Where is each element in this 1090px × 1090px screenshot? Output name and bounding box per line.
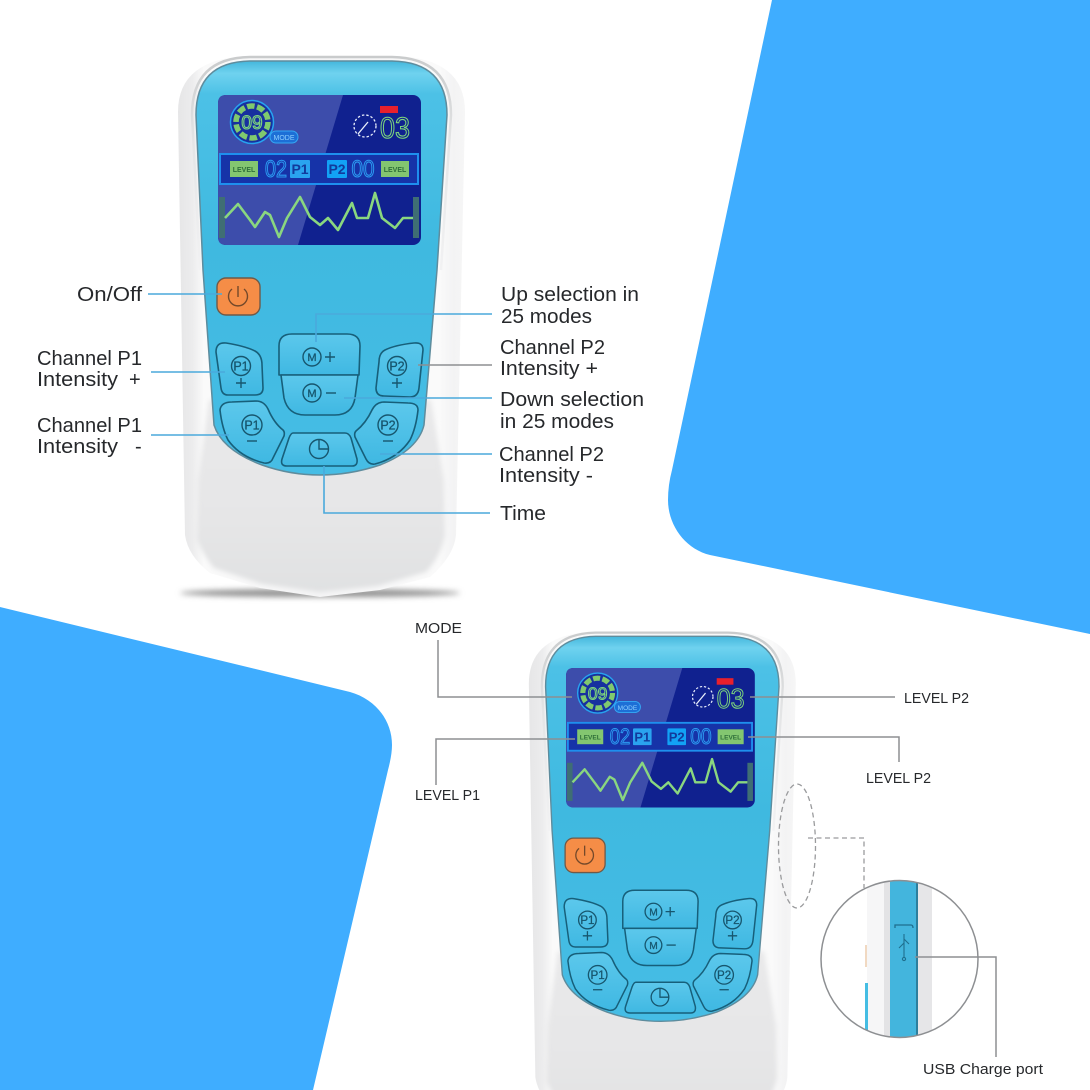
label: Time: Time — [500, 503, 546, 525]
mode ring: 09 — [241, 113, 263, 134]
level band: 02 — [265, 156, 287, 183]
screen — [566, 668, 755, 807]
button: P2 minus — [693, 953, 752, 1011]
label: LEVEL P2 lower: LEVEL P2 — [866, 770, 931, 787]
device shadow — [180, 589, 460, 597]
timer: 03 — [380, 112, 410, 145]
waveform — [219, 193, 419, 238]
label: Channel P1 Intensity +: Channel P1 — [37, 348, 142, 370]
waveform — [567, 759, 753, 801]
timer — [354, 106, 410, 145]
label: Up selection — [501, 284, 639, 328]
screen — [218, 95, 421, 245]
button: mode up — [623, 890, 698, 928]
button: P2 plus: P2 — [389, 360, 405, 374]
label: Channel P2 Intensity - — [499, 444, 604, 487]
callout: USB port magnifier — [821, 880, 978, 1043]
mode ring — [578, 673, 640, 713]
button: P1 plus: P1 — [233, 360, 249, 374]
button: P2 plus: P2 — [725, 914, 740, 927]
leader line: USB port — [915, 957, 996, 1057]
label: Channel P1 Intensity +: Intensity — [37, 369, 118, 391]
button: mode down — [625, 928, 696, 966]
level band: 02 — [610, 724, 630, 749]
device lower shell — [547, 952, 777, 1090]
label: Channel P1 Intensity - — [37, 415, 142, 458]
timer: 03 — [717, 683, 745, 714]
level band: P1 — [634, 729, 650, 744]
button: clock — [282, 433, 357, 466]
label: Down selection — [500, 389, 644, 433]
button: clock — [625, 982, 695, 1013]
blue face — [196, 61, 447, 475]
level band — [568, 723, 752, 751]
face rim — [542, 633, 783, 831]
label: Channel P2 Intensity +: Channel P2 — [500, 337, 605, 359]
level band: LEVEL — [720, 735, 741, 742]
device: bottom controller — [529, 632, 796, 1090]
button: mode down: M — [649, 941, 658, 952]
timer — [693, 678, 745, 714]
label: Down selection: Down selection — [500, 389, 644, 411]
level band: LEVEL — [580, 735, 601, 742]
level band: 00 — [352, 156, 374, 183]
level band: LEVEL — [384, 167, 407, 174]
button: P1 plus: P1 — [580, 914, 595, 927]
label: LEVEL P1: LEVEL P1 — [415, 787, 480, 804]
callout: USB port location dashed marker — [778, 784, 864, 908]
button: P1 minus — [568, 953, 628, 1010]
button: P2 plus — [376, 343, 423, 397]
button: mode up — [279, 334, 360, 375]
mode ring — [230, 100, 298, 144]
face rim — [192, 57, 451, 270]
label: USB Charge port: USB Charge port — [923, 1061, 1044, 1078]
level band: P1 — [291, 161, 309, 177]
power button — [565, 838, 605, 873]
level band: P2 — [328, 161, 346, 177]
button: P2 minus: P2 — [717, 969, 731, 982]
label: Up selection: Up selection in — [501, 284, 639, 306]
button: mode up: M — [307, 352, 317, 364]
device body — [529, 632, 796, 1090]
label: Channel P1 Intensity +: + — [129, 369, 141, 391]
label: Channel P1 Intensity + — [37, 348, 142, 391]
mode ring: 09 — [588, 684, 607, 704]
button: P1 plus — [216, 343, 263, 395]
label: Down selection: in 25 modes — [500, 411, 614, 433]
level band: LEVEL — [233, 167, 256, 174]
button: P1 minus — [220, 401, 284, 463]
button: mode down: M — [307, 388, 317, 400]
label: Channel P1 Intensity -: Channel P1 — [37, 415, 142, 437]
label: Channel P2 Intensity -: Channel P2 — [499, 444, 604, 466]
background shape: top right blue panel — [668, 0, 1090, 634]
level band: 00 — [690, 724, 712, 749]
button: P2 plus — [713, 898, 757, 949]
label: Channel P2 Intensity +: Intensity + — [500, 358, 598, 380]
icon: USB port — [895, 925, 913, 961]
mode ring: MODE — [274, 135, 295, 142]
label: MODE: MODE — [415, 620, 462, 637]
device body — [178, 56, 465, 597]
button: P2 minus: P2 — [380, 418, 396, 432]
level band: P2 — [669, 729, 685, 744]
device lower shell — [197, 400, 445, 592]
power button — [217, 278, 260, 315]
button: P1 minus: P1 — [591, 969, 605, 982]
button: P1 minus: P1 — [244, 418, 260, 432]
label: LEVEL P2 upper: LEVEL P2 — [904, 690, 969, 707]
label: Channel P1 Intensity -: Intensity — [37, 436, 118, 458]
label: Up selection: 25 modes — [501, 306, 592, 328]
label: Channel P2 Intensity -: Intensity - — [499, 465, 593, 487]
label: On/Off: On/Off — [77, 284, 142, 306]
label: Channel P1 Intensity -: - — [135, 436, 142, 458]
background shape: bottom left blue panel — [0, 607, 392, 1090]
blue face — [546, 636, 779, 1021]
label: Channel P2 Intensity + — [500, 337, 605, 380]
device: top controller — [178, 56, 465, 597]
button: mode up: M — [649, 907, 658, 918]
mode ring: MODE — [618, 705, 638, 712]
button: mode down — [281, 375, 358, 415]
leader lines: bottom device — [436, 640, 899, 785]
leader lines: top device — [148, 294, 492, 513]
button: P1 plus — [564, 899, 608, 947]
level band — [220, 154, 418, 184]
button: P2 minus — [355, 402, 418, 464]
